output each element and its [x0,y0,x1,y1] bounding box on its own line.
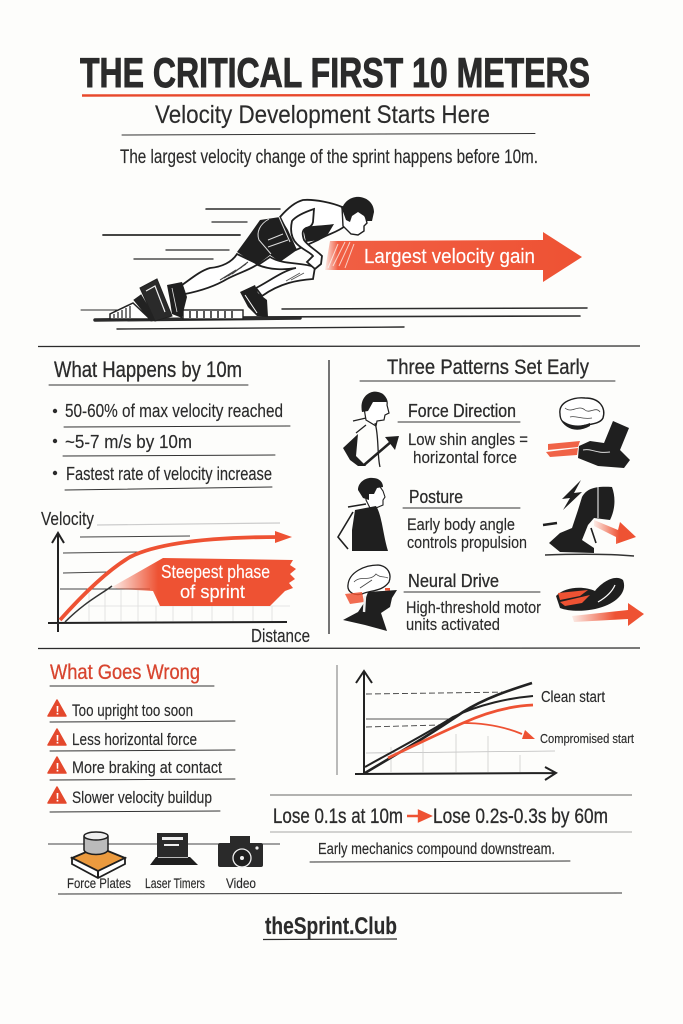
bullet list [53,401,290,490]
heading: Three Patterns Set Early [387,355,589,379]
compromised start curve [388,705,533,758]
title underline [82,94,590,97]
arrow [407,811,430,821]
panel: clean vs compromised chart: Compromised start [540,732,634,746]
section divider [38,345,640,348]
pattern: posture: controls propulsion [407,533,527,552]
warning list: ! [56,760,60,774]
pattern: posture [338,478,636,556]
warning list: More braking at contact [72,759,222,777]
arm [291,209,322,269]
hair [342,197,374,222]
x axis label: Distance [251,626,310,646]
bullet list: Fastest rate of velocity increase [66,464,272,484]
panel: three patterns set early [338,355,644,634]
back shoe [167,282,187,318]
warning list: Less horizontal force [72,731,197,749]
speed lines [81,209,587,329]
panel: what goes wrong [48,661,280,891]
heading rule [360,380,615,382]
bullet list: ~5-7 m/s by 10m [65,432,192,452]
description: Early body angle [407,515,515,534]
icon: foot with red arrow [556,578,644,626]
warning list: ! [56,732,60,746]
heading rule [50,685,214,687]
description: High-threshold motor [406,598,541,617]
brush label: Steepest phase [161,561,270,582]
icon: laser timers [150,833,198,865]
warning list: Too upright too soon [72,702,193,720]
time loss left: Lose 0.1s at 10m [273,805,403,828]
subtitle rule [122,134,535,135]
heading: What Goes Wrong [50,661,200,684]
steepest phase brush [112,558,296,606]
sprinter figure [167,197,374,318]
label: Force Direction [408,400,516,421]
time loss callout [270,795,632,862]
panel: what happens by 10m [41,357,310,646]
icon: head with brain [343,565,397,631]
head [342,204,367,235]
label: Posture [409,486,463,507]
y axis label: Velocity [41,509,94,529]
velocity chart: of sprint [180,581,245,602]
panel: clean vs compromised chart [337,665,634,780]
measurement tools: Video [226,875,256,891]
pattern: force direction: horizontal force [413,448,517,467]
grey curve [65,586,112,622]
clean start curves [365,683,532,773]
icon: leg with red arrow [543,480,636,556]
description: Low shin angles = [408,430,528,449]
warning list: Slower velocity buildup [72,789,212,807]
axes [355,671,556,780]
heading: What Happens by 10m [54,357,242,382]
back leg [182,254,258,294]
section divider [38,647,640,650]
icon: athlete upper body [338,478,388,551]
takeaway: Early mechanics compound downstream. [318,841,555,858]
measurement tools: Laser Timers [145,875,205,891]
warning list [48,700,235,812]
header [80,49,590,168]
bullet list: 50-60% of max velocity reached [65,401,283,421]
pattern: neural drive [343,565,644,634]
velocity chart [41,509,310,646]
brush hatch [328,242,354,268]
intro sentence: The largest velocity change of the sprint happens before 10m. [120,147,538,168]
curve labels: Clean start [541,689,606,706]
warning list: ! [56,790,60,804]
icon: video camera [218,836,263,867]
subtitle: Velocity Development Starts Here [155,101,490,129]
starting blocks [110,279,243,321]
measurement tools [48,832,280,891]
time loss right: Lose 0.2s-0.3s by 60m [433,805,608,828]
hero: sprinter leaving blocks with velocity arrow [81,197,587,329]
icon: brain and shoe [546,398,630,468]
front leg [256,257,315,296]
heading rule [49,384,248,386]
icon: force plates [72,832,125,878]
brand footer: theSprint.Club [265,913,397,940]
icon: runner with force arrow [343,392,399,467]
chart grid [366,692,555,772]
front shoe [240,285,268,317]
velocity curve [60,537,280,620]
tool labels: Force Plates [67,875,131,891]
torso [280,200,345,250]
arrow label: Largest velocity gain [364,245,535,268]
chest shading [303,224,334,242]
shorts [237,217,297,265]
velocity arrow [325,232,582,282]
pattern: force direction [343,392,630,468]
label: Neural Drive [408,570,499,591]
pattern: neural drive: units activated [406,615,500,634]
axes [48,533,287,632]
warning list: ! [56,704,60,718]
column divider [328,360,330,634]
chart grid [60,523,290,621]
